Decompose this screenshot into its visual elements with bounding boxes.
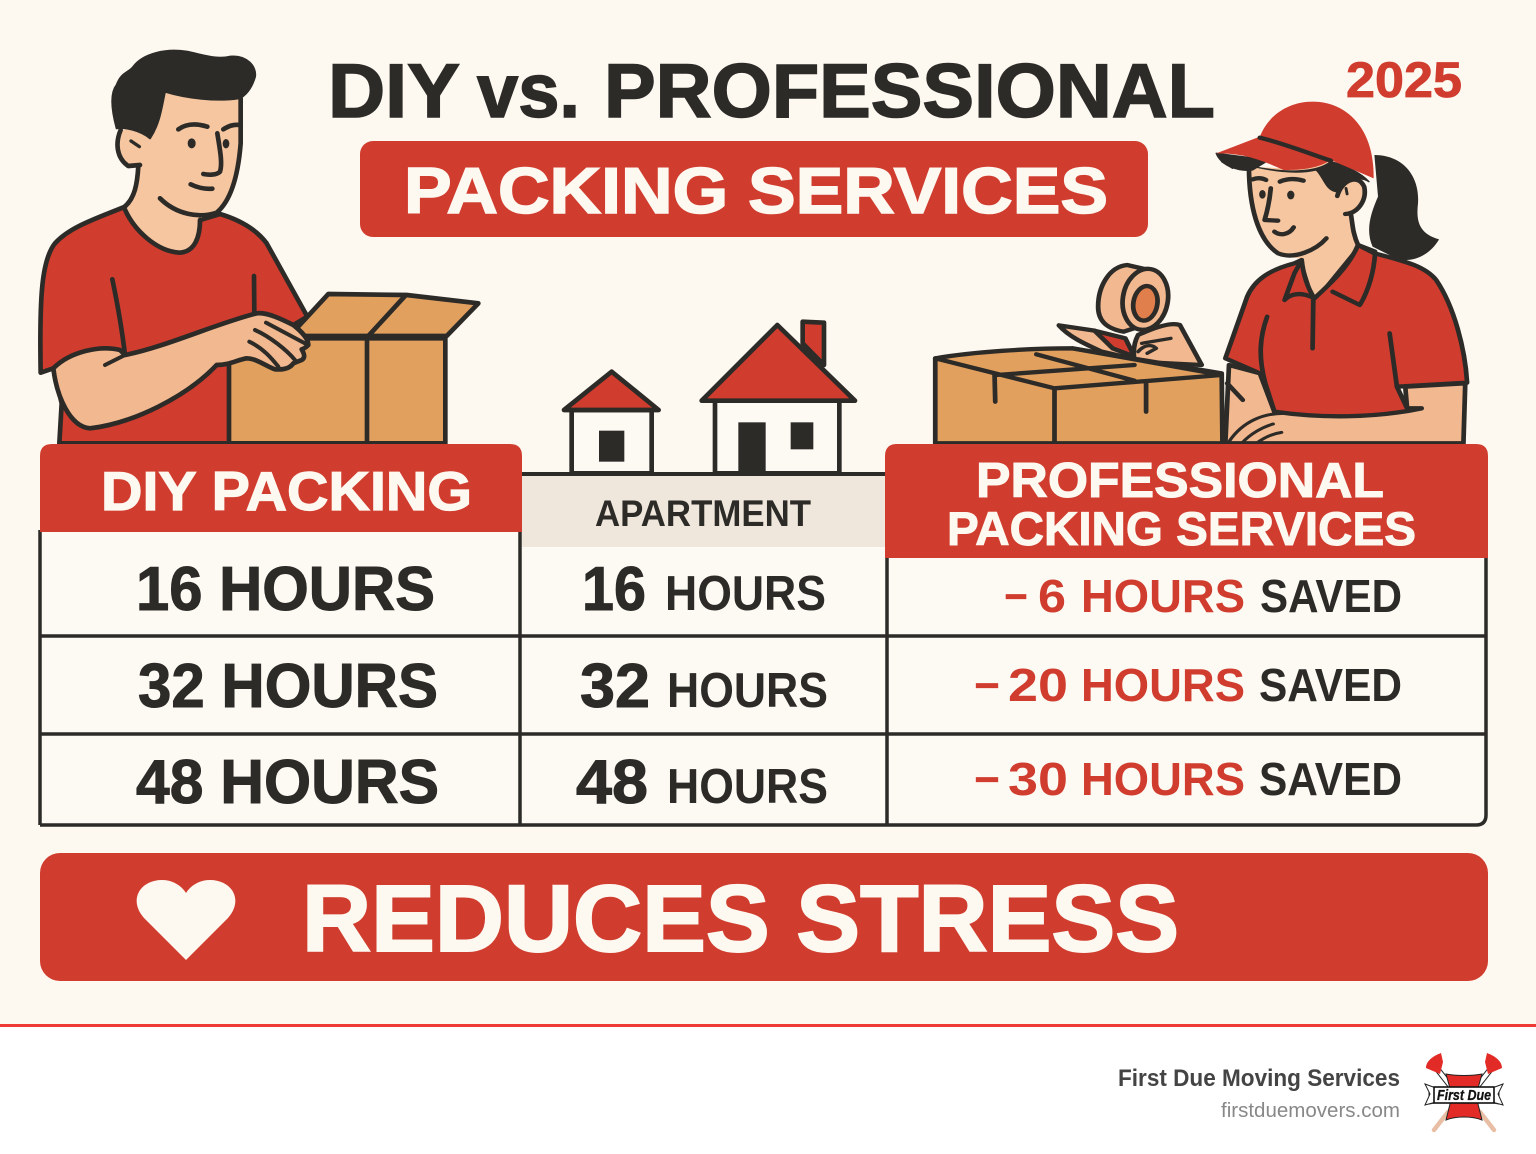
hours saved column: − [974, 659, 1000, 711]
hours saved column: 20 [1008, 659, 1068, 711]
hours saved column [974, 570, 1402, 805]
apartment hours column: 32 [580, 652, 650, 721]
footer brand text: firstduemovers.com [1221, 1099, 1400, 1122]
DIY hours column: 16 HOURS [136, 555, 435, 624]
callout: reduces stress: REDUCES STRESS [302, 866, 1179, 972]
icon: heart [137, 880, 235, 960]
hours saved column: SAVED [1260, 570, 1402, 622]
title: DIY [328, 49, 460, 134]
hours saved column: 30 [1008, 753, 1068, 805]
footer brand text: First Due Moving Services [1118, 1065, 1400, 1092]
hours saved column: SAVED [1259, 659, 1402, 711]
callout: reduces stress [40, 853, 1488, 981]
column header: apartment: APARTMENT [595, 493, 811, 534]
title: vs. [477, 49, 580, 134]
illustration: man packing a box [40, 51, 478, 443]
column header: DIY packing: DIY PACKING [101, 460, 472, 522]
illustration: professional mover with tape and box [935, 102, 1467, 443]
column header: professional packing services: PROFESSIONAL [976, 454, 1384, 508]
hours saved column: − [974, 753, 1000, 805]
icon: First Due logo: First Due [1437, 1088, 1491, 1104]
hours saved column: HOURS [1081, 659, 1245, 711]
apartment hours column: 48 [576, 748, 648, 817]
apartment hours column: HOURS [667, 760, 828, 814]
column header: professional packing services: PACKING SERVICES [947, 502, 1416, 555]
subtitle banner [360, 141, 1148, 237]
title [328, 49, 1215, 134]
hours saved column: 6 [1038, 570, 1066, 622]
DIY hours column: 32 HOURS [138, 652, 438, 721]
footer brand text [1118, 1065, 1400, 1122]
hours saved column: HOURS [1081, 753, 1245, 805]
DIY hours column [136, 555, 439, 817]
column header: DIY packing [40, 444, 522, 532]
hours saved column: SAVED [1259, 753, 1402, 805]
icon: First Due logo [1425, 1053, 1503, 1130]
hours saved column: HOURS [1081, 570, 1245, 622]
illustration: small and large houses [564, 322, 855, 473]
column header: professional packing services [885, 444, 1488, 558]
subtitle banner: PACKING SERVICES [404, 154, 1108, 227]
DIY hours column: 48 HOURS [136, 748, 439, 817]
footer divider [0, 1024, 1536, 1027]
apartment hours column: HOURS [665, 567, 826, 621]
year label: 2025 [1346, 52, 1462, 108]
hours saved column: − [1004, 570, 1028, 622]
comparison table [40, 444, 1488, 825]
apartment hours column: HOURS [667, 664, 828, 718]
title: PROFESSIONAL [604, 49, 1215, 134]
apartment hours column [576, 555, 828, 817]
apartment hours column: 16 [582, 555, 646, 624]
